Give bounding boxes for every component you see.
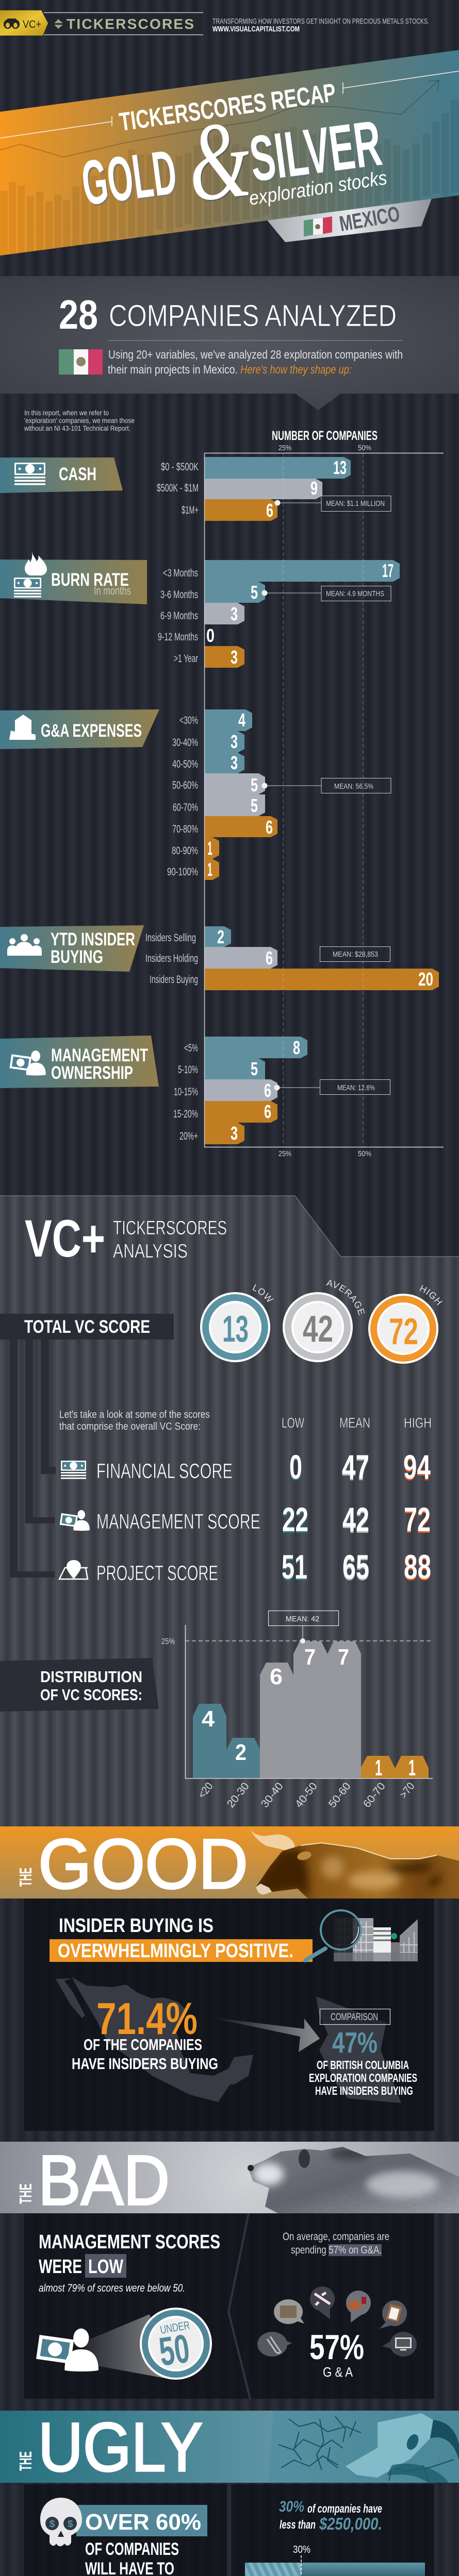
bars: management ownership: 8: [293, 1037, 300, 1058]
category labels: [145, 461, 199, 1142]
row: project score: 65: [342, 1549, 369, 1587]
note: below 50: almost 79% of scores were below 50.: [39, 2282, 185, 2294]
score dial: low 13: LOW: [253, 1284, 273, 1302]
x-axis labels: >70: [398, 1781, 417, 1801]
category labels: Insiders Buying: [150, 974, 198, 986]
bars: G&A expenses: [204, 709, 277, 880]
bar values: 2: [235, 1740, 247, 1765]
category labels: 40-50%: [172, 758, 198, 770]
badge: under 50: [140, 2308, 212, 2380]
callout: mean cash: MEAN: $1.1 MILLION: [326, 499, 385, 508]
category labels: 60-70%: [173, 802, 198, 814]
callout: mean 42: MEAN: 42: [286, 1615, 319, 1623]
ribbon: management ownership: [0, 1036, 159, 1088]
heading: management scores were low: MANAGEMENT SCORES: [39, 2231, 220, 2253]
heading: the good: GOOD: [38, 1825, 248, 1904]
stat: 47%: HAVE INSIDERS BUYING: [315, 2084, 413, 2097]
ribbon: YTD insider buying: BUYING: [51, 947, 103, 967]
text: 30% under $250,000: 30%: [279, 2498, 304, 2515]
row: management score: 72: [404, 1500, 431, 1538]
row: financial score: FINANCIAL SCORE: [96, 1459, 233, 1483]
bars: management ownership: 6: [264, 1080, 271, 1101]
bubble: clipboard: [380, 2300, 407, 2329]
category labels: 3-6 Months: [160, 589, 198, 601]
bar values: 4: [202, 1706, 215, 1732]
text: average G&A spending: spending 57% on G&A.: [291, 2244, 382, 2256]
row: project score: 51: [282, 1548, 307, 1586]
axis labels top: 50%: [358, 444, 371, 452]
bars: management ownership: 5: [251, 1058, 258, 1079]
row: financial score: 47: [342, 1448, 369, 1486]
bars: YTD insider buying: [204, 926, 439, 990]
bars: burn rate: [204, 560, 400, 668]
row: management score: 22: [282, 1502, 308, 1540]
chart heading: NUMBER OF COMPANIES: [272, 429, 378, 443]
row: project score: 65: [342, 1548, 369, 1586]
logo plate: TICKERSCORES: [67, 16, 194, 32]
bars: cash: 6: [266, 500, 273, 521]
panel: under $250,000: [231, 2484, 434, 2576]
row: financial score: 47: [342, 1449, 369, 1487]
callout: mean G&A: [262, 778, 391, 793]
gold VC+ badge: VC+: [23, 19, 41, 30]
highlight: overwhelmingly positive: OVERWHELMINGLY POSITIVE.: [58, 1940, 293, 1962]
x-axis labels: <20: [196, 1781, 216, 1801]
text: will have to re-finance: [85, 2539, 211, 2576]
callout: mean burn rate: MEAN: 4.9 MONTHS: [326, 589, 384, 598]
category labels: 10-15%: [174, 1086, 198, 1098]
note: definition of exploration companies: In this report, when we refer to: [24, 409, 109, 417]
bars: G&A expenses: 1: [207, 838, 212, 859]
image: cracked earth and skull: [268, 2411, 459, 2483]
stat: 71.4%: HAVE INSIDERS BUYING: [72, 2055, 218, 2073]
bars: G&A expenses: 5: [251, 795, 258, 816]
bar values: 1: [408, 1755, 416, 1781]
icon: skull: $: [68, 2519, 73, 2530]
bars: G&A expenses: 4: [238, 709, 245, 731]
ribbon: cash: [0, 457, 123, 493]
icon: Mexico flag: [59, 349, 103, 375]
ribbon: G&A expenses: G&A EXPENSES: [41, 721, 142, 741]
row: management score: MANAGEMENT SCORE: [96, 1510, 260, 1533]
category labels: $1M+: [182, 504, 199, 516]
stat: 71.4%: 71.4%: [96, 1994, 198, 2044]
text: 30% under $250,000: $250,000.: [319, 2514, 382, 2533]
bars: cash: [204, 457, 351, 521]
header: VC+ Tickerscores logo: [0, 10, 203, 36]
text: scores intro: that comprise the overall VC Score:: [59, 1421, 201, 1432]
category labels: >1 Year: [174, 653, 198, 665]
bubble: food and wine: [346, 2291, 371, 2323]
category labels: 15-20%: [173, 1108, 198, 1120]
lighter VC+ analysis panel background: [0, 1196, 459, 1826]
title: Gold: [78, 137, 182, 220]
panel: re-finance: [24, 2484, 227, 2576]
bar values: [202, 1645, 416, 1781]
callout: mean insider buying: [320, 947, 390, 961]
bubble: monitor: [382, 2332, 417, 2357]
bars: YTD insider buying: 2: [217, 926, 224, 947]
title: ampersand: &: [182, 96, 256, 225]
ribbon: cash: CASH: [59, 464, 96, 484]
bubble: airplane: [310, 2286, 335, 2319]
chart: distribution of VC scores: 25%: [161, 1637, 175, 1646]
map: Mexico: [56, 1977, 253, 2102]
label: total VC score: [0, 1314, 174, 1340]
stat: 57% G&A: 57%: [309, 2328, 364, 2367]
score dial: low 13: [200, 1284, 273, 1362]
bar values: 1: [375, 1755, 382, 1781]
row: financial score: 94: [403, 1449, 431, 1487]
axis labels bottom: 50%: [358, 1149, 371, 1158]
icon: skull: [40, 2498, 82, 2546]
category labels: 90-100%: [167, 866, 198, 878]
bar values: 7: [338, 1645, 349, 1670]
title: Silver: [246, 107, 387, 197]
category labels: <3 Months: [163, 567, 198, 579]
bear image: [248, 2147, 459, 2213]
category labels: 5-10%: [178, 1064, 198, 1076]
intro text: their main projects in Mexico.: [108, 363, 238, 376]
icon: manager with cash: [10, 1050, 46, 1075]
stat: 71.4%: OF THE COMPANIES: [84, 2036, 202, 2054]
bull image: [249, 1827, 459, 1899]
bars: burn rate: 17: [382, 560, 394, 581]
x-axis labels: [196, 1781, 417, 1810]
row: financial score: 0: [289, 1448, 302, 1486]
heading: the good: THE: [16, 1868, 35, 1887]
note: definition of exploration companies: [24, 409, 135, 432]
heading: the bad: BAD: [38, 2141, 170, 2220]
bars: G&A expenses: 1: [207, 859, 212, 880]
column headers: low mean high: HIGH: [404, 1415, 432, 1431]
bars: cash: 13: [333, 457, 347, 478]
ribbon: burn rate: [0, 551, 147, 604]
badge: under 50: 50: [156, 2326, 192, 2375]
title: Gold: GOLD: [79, 138, 182, 220]
icon: manager with cash: [36, 2329, 99, 2371]
heading: 28 companies analyzed: COMPANIES ANALYZED: [109, 299, 397, 333]
text: scores intro: Let's take a look at some of the scores: [59, 1409, 210, 1420]
heading: 28 companies analyzed: [59, 292, 397, 337]
row: management score: 22: [282, 1500, 308, 1538]
category labels: Insiders Selling: [145, 932, 196, 944]
x-axis labels: 50-60: [326, 1781, 353, 1810]
ribbon: management ownership: MANAGEMENT: [51, 1045, 148, 1065]
icons: expense bubbles: [257, 2286, 417, 2357]
heading: 28 companies analyzed: 28: [59, 292, 98, 337]
bars: G&A expenses: 3: [231, 731, 238, 752]
heading: management scores were low: [39, 2231, 220, 2278]
stat: 57% G&A: [309, 2328, 364, 2380]
icon: cash stack: [14, 463, 45, 485]
faint stock chart in banner: [0, 80, 459, 259]
intro text: [108, 348, 403, 376]
text: will have to re-finance: OF COMPANIES: [85, 2539, 179, 2559]
bubble: building: [274, 2299, 304, 2324]
stat: 47%: 47%: [332, 2026, 378, 2059]
row: financial score: 0: [289, 1449, 302, 1487]
callout: comparison: [320, 2009, 390, 2025]
text: scores intro: [59, 1409, 210, 1432]
icon: manager with cash: [60, 1510, 90, 1531]
row: project score: PROJECT SCORE: [96, 1561, 218, 1585]
callout: mean burn rate: [262, 586, 391, 601]
icon: office building: [9, 715, 36, 740]
axis labels top: [278, 444, 371, 452]
label: total VC score: TOTAL VC SCORE: [24, 1317, 150, 1337]
callout: mean management ownership: MEAN: 12.6%: [337, 1083, 375, 1092]
ribbon: management ownership: OWNERSHIP: [51, 1063, 133, 1083]
x-axis labels: 60-70: [361, 1781, 388, 1810]
callout: comparison: COMPARISON: [331, 2012, 378, 2023]
bar values: 6: [270, 1664, 283, 1689]
bars: G&A expenses: 3: [231, 752, 238, 773]
row: project score: 88: [404, 1548, 431, 1586]
bars: burn rate: 5: [251, 582, 258, 603]
bars: G&A expenses: 5: [251, 774, 258, 795]
category labels: Insiders Holding: [145, 953, 198, 964]
callout: mean G&A: MEAN: 56.5%: [334, 782, 373, 791]
bars: cash: 9: [310, 478, 318, 499]
text: average G&A spending: [283, 2231, 389, 2256]
x-axis labels: 30-40: [259, 1781, 286, 1810]
score dial: average 42: AVERAGE: [326, 1280, 365, 1316]
spotlight beam: [77, 2314, 170, 2379]
label: distribution of VC scores: OF VC SCORES:: [40, 1686, 142, 1704]
bars: burn rate: 3: [231, 647, 238, 668]
chart: distribution of VC scores: [161, 1611, 433, 1810]
bar: share of companies under $250,000: [244, 2544, 425, 2576]
title banner: [0, 50, 459, 259]
category labels: 20%+: [179, 1130, 198, 1142]
category labels: 30-40%: [172, 737, 198, 749]
stat: 47%: [309, 2026, 417, 2097]
ribbon: YTD insider buying: [0, 925, 144, 972]
bars: management ownership: 3: [231, 1123, 238, 1144]
badge: under 50: UNDER: [159, 2318, 191, 2336]
row: financial score: [61, 1448, 431, 1487]
score dial: high 72: HIGH: [420, 1285, 442, 1306]
icon: meeting people: [7, 934, 42, 956]
row: project score: 88: [404, 1549, 431, 1587]
icon: map pin: [59, 1560, 88, 1579]
heading: management scores were low: WERE: [39, 2256, 82, 2278]
row: management score: 42: [342, 1502, 369, 1540]
ribbon: G&A expenses: [0, 709, 159, 749]
subtitle: exploration stocks: exploration stocks: [248, 167, 388, 210]
heading: the ugly: UGLY: [38, 2409, 203, 2486]
text: 30% under $250,000: less than: [280, 2518, 316, 2531]
callout: mean management ownership: [274, 1080, 390, 1094]
stat: 71.4%: [72, 1994, 218, 2073]
box: over 60%: OVER 60%: [85, 2510, 201, 2535]
panel: 28 companies analyzed: [0, 276, 459, 410]
score dial: average 42: [283, 1280, 365, 1362]
text: 30% under $250,000: [279, 2498, 382, 2533]
category labels: $500K - $1M: [157, 482, 199, 494]
column headers: low mean high: [282, 1415, 432, 1431]
axis labels bottom: 25%: [278, 1149, 291, 1158]
row: management score: [60, 1500, 431, 1540]
intro text: Here's how they shape up:: [240, 363, 352, 376]
text: average G&A spending: On average, companies are: [283, 2231, 389, 2243]
intro text: Using 20+ variables, we've analyzed 28 exploration companies with: [108, 348, 403, 361]
banner: the ugly: [0, 2409, 459, 2486]
category labels: <30%: [179, 715, 198, 726]
header tagline: WWW.VISUALCAPITALIST.COM: [212, 25, 300, 33]
bar chart: number of companies: [145, 429, 444, 1158]
heading: VC+ Tickerscores analysis: TICKERSCORES: [113, 1217, 227, 1239]
title: Tickerscores Recap: TICKERSCORES RECAP: [118, 78, 337, 137]
panel: the good: [24, 1899, 434, 2131]
heading: the bad: THE: [16, 2183, 35, 2204]
category labels: 80-90%: [172, 845, 198, 857]
x-axis labels: 20-30: [225, 1781, 252, 1810]
label: distribution of VC scores: DISTRIBUTION: [40, 1668, 142, 1686]
row: project score: 51: [282, 1549, 307, 1587]
logo plate: [44, 12, 203, 35]
score dial: low 13: 13: [222, 1309, 249, 1350]
row: management score: 72: [404, 1502, 431, 1540]
category labels: 70-80%: [172, 823, 198, 835]
banner: the good: [0, 1825, 459, 1904]
bar: share of companies under $250,000: 30%: [293, 2544, 310, 2555]
stat: 57% G&A: G & A: [323, 2364, 353, 2380]
category labels: 50-60%: [172, 779, 198, 791]
category labels: 9-12 Months: [158, 631, 198, 643]
header tagline: [212, 17, 429, 33]
heading: VC+ Tickerscores analysis: VC+: [25, 1209, 105, 1268]
title: Gold: GOLD: [78, 137, 181, 218]
note: definition of exploration companies: without an NI 43-101 Technical Report.: [24, 424, 130, 432]
score dial: average 42: 42: [303, 1309, 333, 1350]
column headers: low mean high: MEAN: [339, 1415, 370, 1431]
panel: the bad: [24, 2213, 434, 2399]
connector strips: [10, 1340, 56, 1578]
callout: mean 42: [268, 1611, 338, 1643]
title: ampersand: &: [183, 97, 257, 226]
Mexico flag small: [304, 216, 332, 236]
banner: the bad: [0, 2141, 459, 2220]
bar values: 7: [304, 1645, 316, 1670]
row: management score: 42: [342, 1500, 369, 1538]
icon: skull: $: [50, 2519, 55, 2530]
callout: mean cash: [274, 496, 391, 511]
label: distribution of VC scores: [0, 1658, 159, 1711]
silver Mexico tag: [266, 196, 433, 242]
silver Mexico tag: MEXICO: [337, 201, 402, 236]
axis labels bottom: [278, 1149, 371, 1158]
icon: buildings under magnifier: [305, 1910, 418, 1961]
bars: YTD insider buying: 6: [266, 947, 273, 969]
bubble: paper clip: [257, 2332, 292, 2357]
score dial: high 72: 72: [389, 1311, 418, 1352]
category labels: <5%: [184, 1042, 198, 1054]
score dial: high 72: [368, 1285, 442, 1364]
note: definition of exploration companies: 'exploration' companies, we mean those: [24, 416, 135, 425]
map: British Columbia: [316, 1996, 401, 2103]
x-axis labels: 40-50: [293, 1781, 320, 1810]
ribbon: burn rate: BURN RATE: [51, 570, 129, 590]
heading: management scores were low: LOW: [88, 2256, 123, 2278]
heading: VC+ Tickerscores analysis: ANALYSIS: [113, 1241, 188, 1262]
heading: VC+ Tickerscores analysis: [25, 1209, 227, 1268]
category labels: $0 - $500K: [161, 461, 199, 473]
heading: insider buying: INSIDER BUYING IS: [59, 1915, 214, 1937]
bars: management ownership: [204, 1037, 307, 1144]
row: financial score: 94: [403, 1448, 431, 1486]
gold VC+ badge: [0, 10, 48, 36]
column headers: low mean high: LOW: [282, 1415, 304, 1431]
bars: burn rate: 3: [231, 603, 238, 624]
text: 30% under $250,000: of companies have: [307, 2502, 382, 2515]
callout: mean insider buying: MEAN: $28,853: [333, 950, 378, 959]
bars: YTD insider buying: 20: [418, 969, 433, 990]
ribbon: YTD insider buying: YTD INSIDER: [51, 929, 135, 950]
row: project score: [59, 1548, 431, 1587]
bars: management ownership: 6: [264, 1101, 271, 1122]
icon: burning money: [14, 551, 47, 598]
stat: 47%: OF BRITISH COLUMBIA: [317, 2058, 409, 2072]
heading: the ugly: THE: [16, 2451, 35, 2471]
bars: burn rate: 0: [206, 625, 215, 646]
bars: G&A expenses: 6: [266, 817, 273, 838]
banner rules: [0, 71, 459, 138]
category labels: 6-9 Months: [160, 610, 198, 622]
axis labels top: 25%: [278, 444, 291, 452]
arrow: comparison: [208, 2017, 320, 2052]
ribbon: burn rate: In months: [94, 584, 131, 597]
icon: cash stack: [61, 1461, 86, 1479]
